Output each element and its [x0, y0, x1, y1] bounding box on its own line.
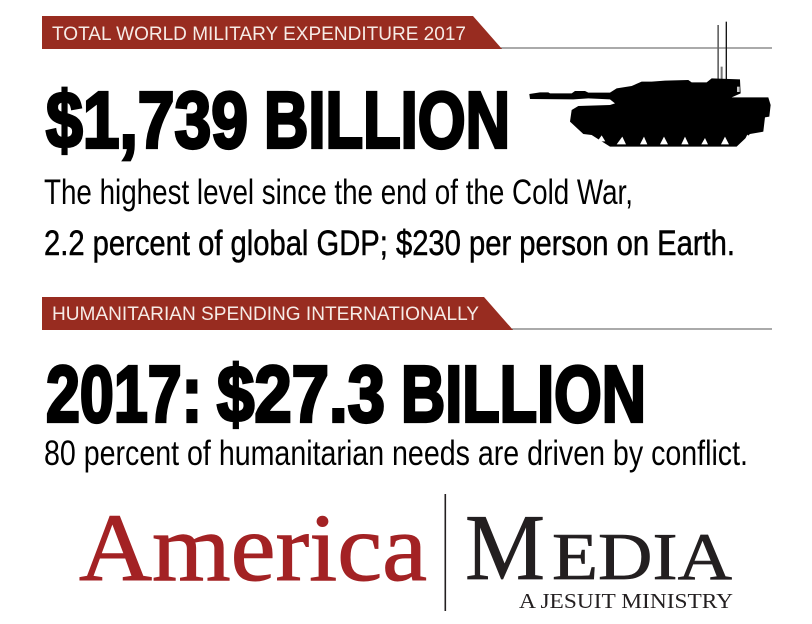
- banner: total world military expenditure: TOTAL WORLD MILITARY EXPENDITURE 2017: [52, 23, 466, 45]
- banner: humanitarian spending internationally: HUMANITARIAN SPENDING INTERNATIONALLY: [52, 303, 479, 325]
- logo tagline: A JESUIT MINISTRY: [519, 589, 733, 613]
- heading: 2017: $27.3 billion: [46, 350, 646, 438]
- icon: tank silhouette: [529, 22, 771, 147]
- heading: 2017: $27.3 billion: BILLION: [401, 350, 646, 438]
- heading: 2017: $27.3 billion: $27.3: [217, 350, 385, 438]
- text block: highest level since the Cold War: The highest level since the end of the Cold War,: [44, 173, 633, 212]
- heading: $1,739 billion: BILLION: [264, 76, 510, 164]
- heading: 2017: $27.3 billion: 2017:: [46, 350, 202, 438]
- logo wordmark: America: America: [79, 494, 427, 601]
- heading: $1,739 billion: $1,739: [46, 76, 248, 164]
- logo: America Media: [79, 494, 733, 613]
- banner: total world military expenditure: [42, 16, 502, 49]
- logo wordmark: Media: [465, 496, 732, 600]
- banner: humanitarian spending internationally: [42, 297, 513, 330]
- panel: humanitarian spending: [42, 297, 772, 473]
- logo wordmark: Media: M: [465, 496, 545, 600]
- heading: $1,739 billion: [46, 76, 510, 164]
- panel: military expenditure: [42, 16, 772, 263]
- logo wordmark: Media: EDIA: [552, 520, 732, 594]
